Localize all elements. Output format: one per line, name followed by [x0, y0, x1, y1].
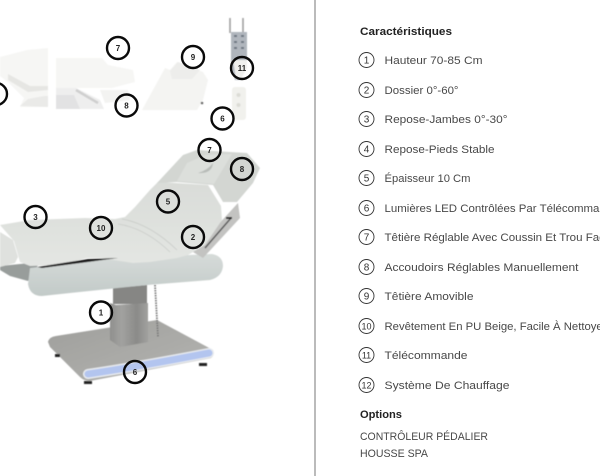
item 1: 1 — [364, 56, 370, 66]
foot shadow — [0, 262, 40, 281]
marker 8: 8 — [240, 165, 245, 174]
marker 8 top — [116, 94, 138, 116]
heading: Caractéristiques: Caractéristiques — [360, 26, 452, 38]
item 12: Système De Chauffage — [384, 380, 510, 392]
marker 2: 2 — [191, 233, 196, 242]
icon: wireless remote control — [232, 87, 246, 120]
headrest — [157, 150, 260, 202]
item 12: 12 — [361, 380, 372, 390]
marker 7 — [198, 139, 220, 161]
cushions — [0, 182, 222, 266]
marker 6 top — [212, 108, 234, 130]
column — [113, 285, 147, 304]
features list — [359, 52, 600, 392]
marker 6 top: 6 — [220, 114, 225, 124]
marker 3 — [24, 206, 46, 228]
item 11 — [359, 348, 468, 362]
cushion wrinkles — [118, 219, 177, 252]
item 7: 7 — [364, 232, 370, 244]
item 5: Épaisseur 10 Cm — [384, 172, 470, 185]
item 3: Repose-Jambes 0°-30° — [384, 114, 508, 126]
heading: Options: Options — [360, 409, 402, 421]
marker 9: 9 — [191, 53, 196, 62]
item 10: Revêtement En PU Beige, Facile À Nettoyer — [384, 320, 600, 333]
marker 7 top: 7 — [116, 44, 121, 53]
item 11: 11 — [362, 350, 371, 360]
callout markers — [0, 37, 253, 383]
massage table — [0, 150, 260, 384]
item 8 — [359, 260, 578, 274]
feet — [55, 354, 207, 384]
marker 5: 5 — [166, 198, 171, 206]
item 5: 5 — [364, 174, 370, 184]
item 12 — [359, 378, 510, 392]
item 2 — [359, 82, 458, 98]
item 11: Télécommande — [384, 350, 468, 362]
marker 4 — [0, 83, 7, 105]
item 3 — [359, 112, 508, 126]
marker 1 — [90, 302, 112, 324]
vertical divider — [314, 0, 316, 476]
item 6: 6 — [364, 204, 370, 214]
options list: CONTRÔLEUR PÉDALIER — [360, 430, 488, 443]
thumbnail: removable headrest — [142, 62, 208, 110]
item 4: 4 — [364, 144, 370, 156]
marker 3: 3 — [33, 213, 38, 222]
item 4 — [359, 142, 494, 156]
base plate — [48, 320, 214, 381]
item 2: 2 — [364, 86, 370, 96]
options list — [360, 430, 488, 460]
black gap — [37, 258, 118, 268]
item 8: 8 — [364, 262, 370, 274]
item 9: 9 — [364, 292, 370, 302]
item 3: 3 — [364, 114, 370, 126]
marker 7: 7 — [207, 146, 212, 155]
item 10: 10 — [361, 322, 372, 332]
thumbnail: leg rest detail — [0, 48, 48, 107]
thumbnail: headrest and armrest detail — [56, 58, 135, 109]
marker 6 — [124, 361, 146, 383]
chain — [155, 285, 158, 337]
tilt frame — [193, 203, 240, 258]
marker 7 top — [107, 37, 129, 59]
item 5 — [359, 170, 470, 186]
foot pad — [0, 232, 18, 267]
item 9: Têtière Amovible — [384, 291, 474, 303]
marker 6: 6 — [133, 368, 138, 377]
item 1 — [359, 52, 482, 68]
item 9 — [359, 288, 474, 304]
options list: HOUSSE SPA — [360, 448, 429, 460]
item 8: Accoudoirs Réglables Manuellement — [384, 262, 578, 274]
item 7: Têtière Réglable Avec Coussin Et Trou Facial — [384, 232, 600, 244]
table shell — [28, 254, 223, 296]
LED strip — [88, 353, 209, 374]
marker 11 — [231, 57, 253, 79]
item 2: Dossier 0°-60° — [384, 85, 458, 97]
marker 2 — [182, 226, 204, 248]
icon: wired remote control — [230, 18, 247, 80]
marker 1: 1 — [99, 308, 104, 318]
marker 5 — [157, 190, 179, 212]
item 1: Hauteur 70-85 Cm — [384, 55, 482, 67]
item 4: Repose-Pieds Stable — [384, 144, 494, 156]
marker 11: 11 — [238, 64, 247, 73]
marker 9 — [182, 46, 204, 68]
marker 8 — [231, 158, 253, 180]
marker 10 — [90, 217, 112, 239]
marker 8 top: 8 — [124, 102, 129, 110]
marker 10: 10 — [97, 224, 106, 233]
